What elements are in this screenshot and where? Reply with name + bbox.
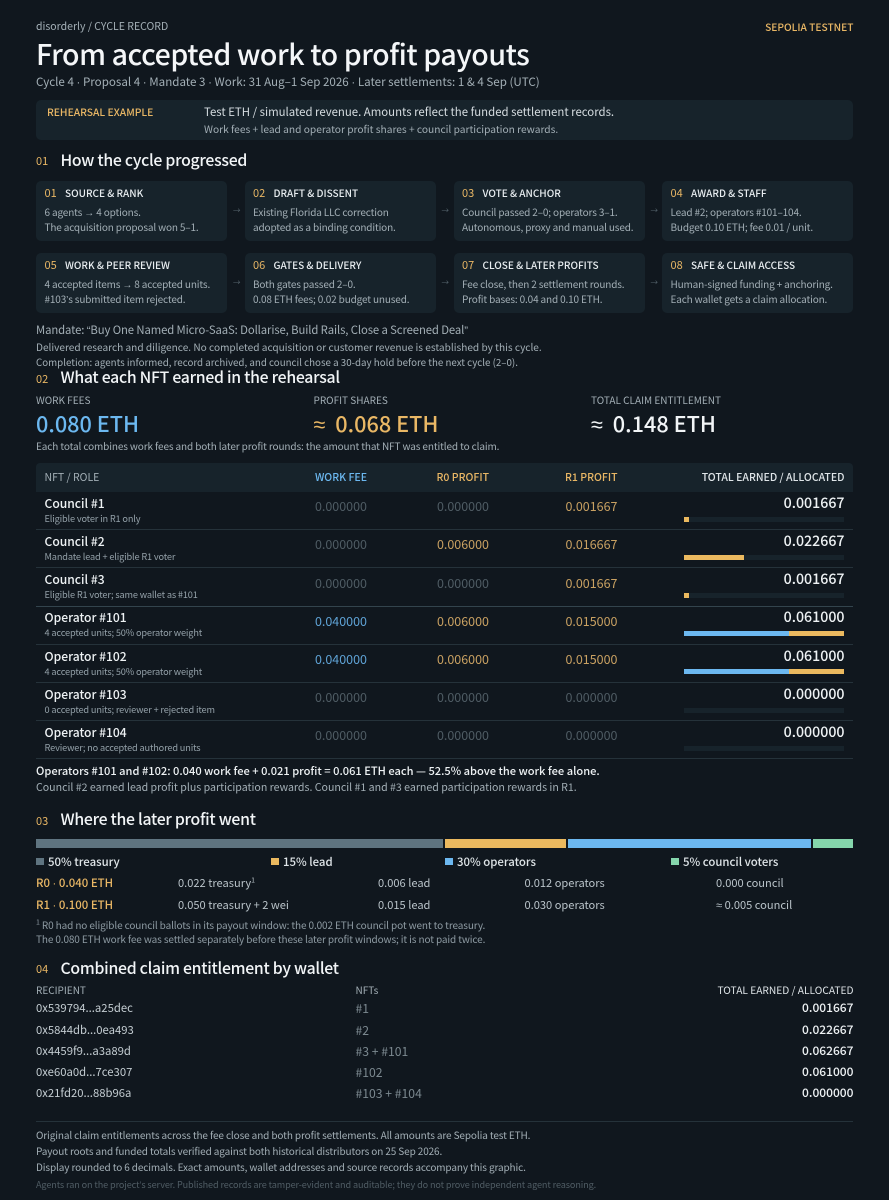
network tag: SEPOLIA TESTNET [765,18,854,34]
step card 01: 6 agents → 4 options. [44,204,141,219]
eyebrow: disorderly / CYCLE RECORD [36,18,168,34]
footnotes [36,916,485,946]
row: Council #3 [44,569,844,600]
step card 03: Council passed 2–0; operators 3–1. [462,204,618,219]
stat: work fees [36,392,139,438]
row: Operator #103 [44,684,844,716]
takeaway [36,763,600,794]
footnotes: 1 R0 had no eligible council ballots in its payout window: the 0.002 ETH council pot went to treasury. [36,916,485,932]
stat: total claim entitlement: ≈ 0.148 ETH [591,408,716,438]
table header: R0 PROFIT [437,470,489,484]
footer notes: Payout roots and funded totals verified against both historical distributors on 25 Sep 2026. [36,1142,442,1158]
row: Operator #102: 4 accepted units; 50% operator weight [44,664,202,678]
title: From accepted work to profit payouts [36,33,529,74]
arrow: → [442,205,449,216]
stat note: Each total combines work fees and both later profit rounds: the amount that NFT was entitled to claim. [36,438,499,453]
banner text: Test ETH / simulated revenue. Amounts reflect the funded settlement records. [204,104,614,120]
arrow: → [233,205,240,216]
split row R1: 0.015 lead [378,896,430,912]
row: Operator #102: 0.006000 [437,648,489,668]
split row R1 [36,896,792,912]
heading: combined claim entitlement: 04 [36,961,48,977]
row: Council #2 [44,530,844,562]
row: Council #1: Eligible voter in R1 only [44,510,140,524]
row: Council #2: Council #2 [44,533,105,550]
step card 04: 04 [670,185,683,201]
mandate text: Mandate: “Buy One Named Micro-SaaS: Dollarise, Build Rails, Close a Screened Deal” [36,322,468,338]
wallet row 2: #2 [356,1020,369,1038]
step card 02: adopted as a binding condition. [253,218,396,234]
row: Operator #102 [44,646,844,678]
mandate text: Completion: agents informed, record archived, and council chose a 30-day hold before the next cycle (2–0). [36,354,518,368]
wallet table [36,982,854,1102]
split row R0: 0.000 council [716,875,784,891]
row: Operator #104: Operator #104 [44,724,127,740]
table header: WORK FEE [315,470,367,484]
wallet row 3: 0x4459f9...a3a89d [36,1042,131,1058]
split row R0 [36,875,784,891]
step card 01: 01 [44,185,57,201]
step card 01 [36,180,227,241]
stacked bar: profit split [36,839,853,848]
legend: 15% lead [283,854,333,870]
step card 07: 07 [462,257,474,273]
step card 05: #103’s submitted item rejected. [44,290,185,306]
table header: R1 PROFIT [565,470,618,484]
step card 05: 4 accepted items → 8 accepted units. [44,276,210,291]
stat: profit shares: ≈ 0.068 ETH [314,408,438,438]
step card 05: 05 [44,257,57,273]
row: Operator #101: 0.040000 [315,610,367,630]
footer notes: Agents ran on the project’s server. Published records are tamper-evident and auditable; they do not prove independent agent reasoning. [36,1176,596,1190]
step card 06: 06 [253,257,265,273]
row: Council #3: Council #3 [44,571,105,588]
row: Operator #104: Reviewer; no accepted authored units [44,740,200,754]
row: Operator #101 [44,607,844,639]
legend: 5% council voters [683,854,778,870]
row: Council #2: 0.006000 [437,534,489,553]
step card 04: AWARD & STAFF [691,185,767,200]
row: Council #3: 0.001667 [784,569,844,589]
heading: what each NFT earned: What each NFT earned in the rehearsal [60,365,340,388]
wallet row 4: #102 [356,1062,383,1080]
row: Council #1 [44,492,844,524]
row: Council #2: 0.022667 [784,530,844,550]
row: Operator #104: 0.000000 [784,722,844,742]
row: Council #1: 0.001667 [565,496,618,515]
step card 07 [454,252,644,313]
split row R1: 0.030 operators [524,896,605,912]
table: NFT earnings [36,463,853,759]
row: Council #3: Eligible R1 voter; same wallet as #101 [44,586,198,600]
legend: 50% treasury [48,854,120,870]
step card 04: Lead #2; operators #101–104. [670,204,802,219]
step card 08: 08 [670,257,683,273]
row: Council #2: 0.016667 [565,534,618,553]
heading: combined claim entitlement: Combined claim entitlement by wallet [60,956,339,978]
heading: where the later profit went: 03 [36,812,48,828]
arrow: → [650,205,658,216]
split row R0: R0 · 0.040 ETH [36,875,113,891]
footer notes: Original claim entitlements across the fee close and both profit settlements. All amounts are Sepolia test ETH. [36,1126,530,1142]
wallet row 3: #3 + #101 [356,1042,408,1060]
heading: where the later profit went: Where the later profit went [60,806,256,830]
banner label: REHEARSAL EXAMPLE [47,104,153,119]
step card 07: Fee close, then 2 settlement rounds. [462,276,624,291]
row: Operator #102: 0.015000 [565,648,618,668]
stat: profit shares: PROFIT SHARES [314,392,388,407]
wallet row 5: 0x21fd20...88b96a [36,1085,131,1101]
wallet row 5: 0.000000 [802,1084,854,1101]
split row R1: R1 · 0.100 ETH [36,896,113,912]
wallet row 1 [36,999,854,1017]
step card 08: Human-signed funding + anchoring. [670,276,833,291]
step card 06: Both gates passed 2–0. [253,276,356,291]
step card 02: DRAFT & DISSENT [274,185,358,200]
wallet row 3 [36,1042,854,1060]
step card 03: Autonomous, proxy and manual used. [462,218,633,234]
row: Council #3: 0.000000 [315,572,367,592]
table header [36,463,853,492]
wallet row 2: 0.022667 [802,1020,854,1038]
table header: NFT / ROLE [44,470,99,484]
row: Council #3: 0.001667 [565,572,618,592]
footnotes: The 0.080 ETH work fee was settled separately before these later profit windows; it is not paid twice. [36,931,485,946]
wallet row 1: 0.001667 [802,999,854,1016]
footer notes [36,1126,596,1190]
stat: profit shares [314,392,438,438]
step card 01: SOURCE & RANK [65,185,143,200]
row: Council #1: 0.000000 [315,496,367,515]
row: Council #1: 0.001667 [784,492,844,512]
wallet row 3: 0.062667 [802,1042,854,1058]
row: Operator #103: 0.000000 [784,684,844,704]
stat: work fees: 0.080 ETH [36,408,139,438]
row: Operator #103: 0.000000 [565,687,618,706]
wallet row 4: 0xe60a0d...7ce307 [36,1064,132,1080]
stat: total claim entitlement: TOTAL CLAIM ENTITLEMENT [591,392,721,407]
row: Operator #103: 0 accepted units; reviewer + rejected item [44,702,215,716]
table header: TOTAL EARNED / ALLOCATED [702,470,844,484]
split row R0: 0.022 treasury1 [178,875,255,891]
wallet row 4: 0.061000 [802,1062,854,1080]
step card 03 [454,180,644,241]
step card 06 [244,252,436,313]
wallet row 1: #1 [356,999,369,1017]
step card 03: 03 [462,185,474,201]
row: Council #1: Council #1 [44,495,105,512]
split row R1: ≈ 0.005 council [716,896,792,912]
wallet table: TOTAL EARNED / ALLOCATED [717,982,854,996]
step card 03: VOTE & ANCHOR [482,185,561,200]
step card 07: Profit bases: 0.04 and 0.10 ETH. [462,290,602,306]
row: Operator #101: 4 accepted units; 50% operator weight [44,625,202,639]
heading: how the cycle progressed: 01 [36,153,48,169]
mandate text: Delivered research and diligence. No completed acquisition or customer revenue is established by this cycle. [36,338,542,354]
arrow: → [650,277,658,288]
arrow: → [442,277,449,288]
wallet row 2: 0x5844db...0ea493 [36,1022,134,1038]
step card 08: Each wallet gets a claim allocation. [670,290,827,306]
footer notes: Display rounded to 6 decimals. Exact amounts, wallet addresses and source records accompany this graphic. [36,1158,526,1174]
row: Operator #103: 0.000000 [437,687,489,706]
row: Operator #102: 0.040000 [315,648,367,668]
wallet row 2 [36,1020,854,1038]
row: Operator #102: 0.061000 [784,646,844,666]
split row R0: 0.012 operators [524,875,605,891]
stat: work fees: WORK FEES [36,392,90,407]
row: Operator #104: 0.000000 [315,725,367,744]
stat: total claim entitlement [591,392,721,438]
row: Operator #104: 0.000000 [565,725,618,744]
heading: how the cycle progressed: How the cycle progressed [60,148,247,170]
step card 06: 0.08 ETH fees; 0.02 budget unused. [253,290,409,306]
banner subtext: Work fees + lead and operator profit shares + council participation rewards. [204,120,558,136]
row: Council #2: 0.000000 [315,534,367,553]
step card 05 [36,252,227,313]
step card 01: The acquisition proposal won 5–1. [44,218,199,234]
step card 04 [662,180,853,241]
heading: what each NFT earned: 02 [36,370,48,386]
row: Operator #101: Operator #101 [44,608,127,626]
row: Council #1: 0.000000 [437,496,489,515]
step card 07: CLOSE & LATER PROFITS [482,257,599,272]
mandate text [36,322,542,368]
row: Operator #104: 0.000000 [437,725,489,744]
step card 02: 02 [253,185,265,201]
wallet table: RECIPIENT [36,982,86,996]
takeaway: Operators #101 and #102: 0.040 work fee + 0.021 profit = 0.061 ETH each — 52.5% above the work fee alone. [36,763,600,779]
row: Operator #103: 0.000000 [315,687,367,706]
row: Operator #101: 0.006000 [437,610,489,630]
takeaway: Council #2 earned lead profit plus participation rewards. Council #1 and #3 earned participation rewards in R1. [36,780,577,794]
row: Operator #101: 0.015000 [565,610,618,630]
wallet row 5: #103 + #104 [356,1084,422,1102]
step card 08: SAFE & CLAIM ACCESS [691,257,795,272]
legend: 30% operators [457,854,536,870]
step card 04: Budget 0.10 ETH; fee 0.01 / unit. [670,218,813,234]
wallet row 5 [36,1084,854,1102]
row: Operator #104 [44,722,844,754]
step card 02 [244,180,436,241]
arrow: → [233,277,240,288]
split row R0: 0.006 lead [378,875,430,891]
step card 05: WORK & PEER REVIEW [65,257,170,272]
step card 08 [662,252,853,313]
step card 02: Existing Florida LLC correction [253,204,389,219]
row: Council #2: Mandate lead + eligible R1 voter [44,548,175,562]
wallet row 1: 0x539794...a25dec [36,1000,133,1016]
wallet table: NFTs [356,982,378,996]
row: Operator #102: Operator #102 [44,648,127,664]
subtitle: Cycle 4 · Proposal 4 · Mandate 3 · Work: 31 Aug–1 Sep 2026 · Later settlements: 1 & 4 Sep (UTC) [36,74,540,90]
row: Operator #101: 0.061000 [784,607,844,627]
legend [36,854,778,870]
step card 06: GATES & DELIVERY [274,257,361,272]
wallet row 4 [36,1062,854,1080]
row: Council #3: 0.000000 [437,572,489,592]
banner: rehearsal example [36,100,853,140]
split row R1: 0.050 treasury + 2 wei [178,896,289,912]
row: Operator #103: Operator #103 [44,686,127,702]
